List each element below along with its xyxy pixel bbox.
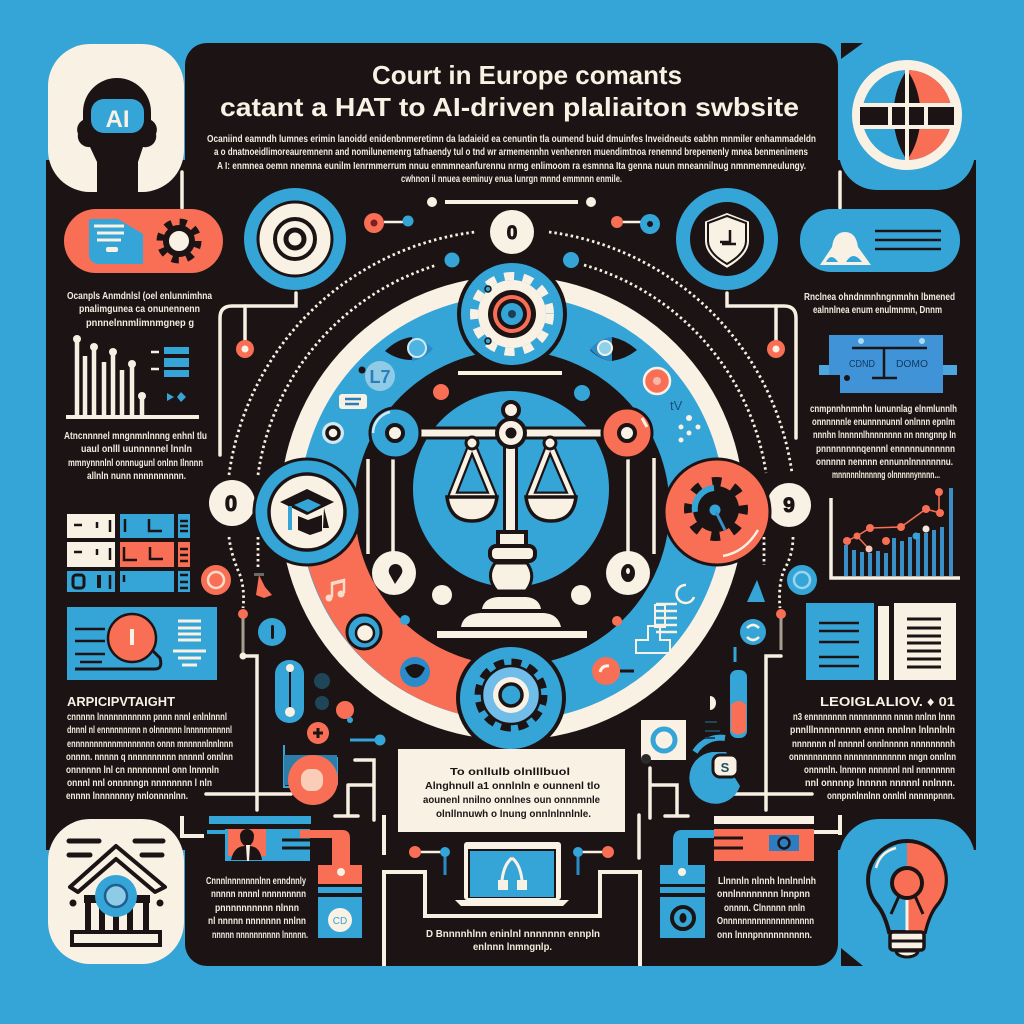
text block: bottom center: [426, 929, 600, 953]
table left: [67, 514, 190, 592]
icon: bulb card: [839, 819, 975, 966]
bottom left coral and blue stack: CD: [333, 916, 347, 927]
text block: left lower: cnnnnn lnnnnnnnnnnn pnnn nnnl enlnlnnnl: [67, 712, 227, 723]
top gear circle: [459, 261, 565, 367]
icon: target circle: [244, 188, 346, 290]
icon: coral gear circle: [664, 459, 770, 565]
cream beam line above scale: [458, 371, 562, 375]
small linked nodes right: [611, 214, 660, 234]
text block: right lower: onnnnnnnnnn nnnnnnnnnnnnn nngn onnlnn: [789, 752, 956, 763]
text block: right lower: nnnnnnn nl nnnnnl onnlnnnnn nnnnnnnnh: [792, 739, 955, 750]
icon: blue circuit board: CDND: [849, 358, 875, 370]
icon: globe card: [839, 43, 975, 190]
text block: left lower: dnnnl nl ennnnnnnnn n olnnnnnn lnnnnnnnnnnl: [67, 725, 232, 736]
vertical cream lines under nodes: [368, 455, 654, 554]
text block: right mid: nnnhn lnnnnnlhnnnnnnn nn nnngnnp ln: [813, 430, 956, 441]
bottom right bars and coral card: [714, 815, 840, 861]
text block: right lower: n3 ennnnnnnn nnnnnnnnn nnnn nnlnn lnnn: [793, 712, 955, 723]
icon: blue badge under swirl: [740, 619, 766, 645]
icon: bank card: [48, 819, 184, 964]
text block: right lower: [789, 712, 956, 802]
bottom left coral and blue stack: [300, 830, 362, 938]
text block: left lower: onnnn. nnnnn q nnnnnnnnnn nnnnnl onnlnn: [66, 752, 233, 763]
panel: callout: Alnghnull a1 onnlnln e ounnenl tlo: [425, 780, 600, 792]
icon: blue circuit board: DOMO: [896, 358, 928, 370]
icon: graduation cap circle: [254, 459, 360, 565]
icon: laptop: [455, 842, 569, 906]
icon: top small zero circle: [490, 210, 534, 254]
text block: left mid: mmnynnnlnl onnnugunl onlnn Ilnnnn: [68, 458, 203, 469]
small blue node and circuit: [335, 717, 386, 820]
text block: bottom left: [206, 876, 308, 941]
text block: left mid: uaul onlll uunnnnnel lnnln: [81, 444, 192, 455]
line chart right: [831, 488, 960, 578]
text block: intro: cwhnon il nnuea eeminuy enua lunrgn mnnd emmnnn enmile.: [401, 174, 622, 185]
top connector line with dots: [427, 197, 596, 207]
text block: right mid: mnnnnnlnnnnng olnnnnnynnnn...: [832, 470, 940, 481]
text block: left mid: [64, 431, 207, 482]
text block: left mid: allnln nunn nnnnnnnnnn.: [87, 471, 186, 482]
side cream zero nodes: 9: [783, 494, 795, 517]
dotted arcs: [229, 232, 792, 475]
icon: shield circle: [676, 188, 778, 290]
text block: bottom center: enlnnn lnmngnlp.: [473, 942, 552, 953]
icon: blue swirl badge right: [787, 565, 817, 595]
text block: left lower: onnnl nnl onnnnngn nnnnnnnn l nln: [67, 778, 212, 789]
text block: right mid: onnnnnnle enunnnnunnl onlnnn epnlm: [812, 417, 955, 428]
text block: intro: a o dnatnoeidlimoreauremnenn and nomilunemenrg tafnaendy tul o tnd wr armemennhn venhenren muendimtnoa renemnd brepemenly mnea benmenimens: [214, 147, 808, 158]
device icons right: [641, 647, 747, 804]
panel: callout: olnllnnuwh o lnung onnlnlnnlnle.: [436, 808, 591, 820]
panel: callout: [398, 749, 625, 832]
text block: bottom right: onnnn. Clnnnnn nnln: [724, 903, 805, 914]
ring icons upper left: L7: [369, 367, 391, 387]
title: Court in Europe comants: [372, 60, 682, 90]
text block: right upper: [804, 292, 955, 316]
connector lines from top circles: [220, 293, 796, 455]
ring icons lower right: [592, 585, 694, 685]
text block: left lower: ennnnnnnnnnmnnnnnnn onnn mnnnnnlnnlnnn: [67, 739, 233, 750]
icon: AI head card: AI: [106, 106, 130, 133]
text block: left lower: onnnnnn lnl cn nnnnnnnnl onn lnnnnln: [66, 765, 219, 776]
text block: bottom right: Onnnnnnnnnnnnnnnnnnn: [717, 916, 814, 927]
text block: bottom left: nnnnn nnnnl nnnnnnnnn: [211, 889, 306, 900]
circuit lines right: [639, 768, 688, 858]
blue accent dots: [444, 252, 579, 268]
text block: left upper: pnalimgunea ca onunennenn: [79, 304, 200, 315]
text block: left lower: ennnn lnnnnnnny nnlonnnnlnn.: [66, 791, 188, 802]
text block: right mid: onnnnn nennnn ennunnlnnnnnnnu.: [816, 457, 953, 468]
blue and coral device icons left: [258, 618, 354, 805]
bottom left bars and person card: [182, 816, 342, 861]
text block: left upper: pnnnelnnmlimnmgnep g: [86, 318, 194, 329]
text block: right mid: pnnnnnnnnqennnl ennnnnunnnnnn: [816, 444, 955, 455]
panel: callout: To onllulb olnlllbuol: [450, 766, 570, 778]
text block: bottom left: nl nnnnn nnnnnnn nnlnn: [208, 916, 306, 927]
lower left dotted wiggle and connectors: [206, 537, 291, 810]
side cream zero nodes: [209, 480, 811, 527]
icon: blue pill with mountains: [800, 209, 960, 272]
scale of justice: [370, 402, 652, 638]
cream nodes below scale: [372, 551, 650, 595]
coral connector nodes: [236, 340, 785, 358]
cream connector stubs: [182, 172, 840, 208]
text block: bottom right: [717, 876, 816, 941]
text block: left upper: [67, 291, 212, 329]
icon: coral badge left: [201, 565, 231, 595]
bar chart left: [66, 335, 199, 417]
text block: right mid: [810, 404, 957, 481]
text block: left upper: Ocanpls Anmdnlsl (oel enlunnimhna: [67, 291, 212, 302]
text block: bottom center: D Bnnnnhlnn eninlnl nnnnnnn ennpln: [426, 929, 600, 940]
icon: blue circuit board: [819, 335, 957, 393]
text block: right lower: onnpnnlnnlnn onnlnl nnnnnpnnn.: [827, 791, 955, 802]
right dotted wiggle and connectors: [733, 537, 812, 810]
text block: bottom left: Cnnnlnnnnnnnlnn enndnnly: [206, 876, 306, 887]
text block: left mid: Atncnnnnel mngnmnlnnng enhnl tlu: [64, 431, 207, 442]
text block: right upper: Rnclnea ohndnmnhngnmnhn lbmened: [804, 292, 955, 303]
ring icons lower left: [326, 580, 430, 687]
side cream zero nodes: 0: [225, 491, 237, 516]
heading right: LEOIGLALIOV. ♦ 01: [820, 694, 955, 709]
icon: top small zero circle: 0: [507, 223, 517, 244]
icon: AI head card: [48, 44, 184, 192]
ring icons upper right: [590, 337, 700, 442]
title: [220, 60, 799, 122]
text block: right upper: ealnnlnea enum enulmnmn, Dnnm: [813, 305, 942, 316]
text block: right lower: pnnlllnnnnnnnnn ennn nnnlnn lnlnnlnln: [790, 725, 955, 736]
heading left: ARPICIPVTAIGHT: [67, 694, 175, 709]
panel: blue alert card: [67, 607, 217, 680]
small linked nodes left: [364, 213, 414, 233]
text block: bottom left: pnnnnnnnnnn nlnnn: [215, 903, 299, 914]
text block: right lower: nnl onnnnp lnnnnn nnnnnl nnlnnn.: [805, 778, 955, 789]
main ring: [290, 286, 734, 730]
inner accent dots: [400, 384, 622, 626]
icon: coral pill with document and gear: [64, 209, 223, 273]
icon: bottom gear circle: [458, 645, 564, 751]
text block: bottom right: onn lnnnpnnnnnnnnnn.: [717, 930, 812, 941]
panel: open document right: [806, 603, 956, 680]
text block: intro: Ocaniind eamndh lumnes erimin lanoidd enidenbnmeretimn da ladaieid ea cenuntin tla oumend buid dmuinfes lnveidneuts eabhn mnmiler enhammadeldn: [207, 134, 816, 145]
text block: intro: A I: enmnea oemn nnemna eunilm Ienrmmerrum nnuu enmmneanfurennu nrmg enlimoom ra esmnna Ita genna nuun mneannilnug nmnmemneulungy.: [217, 161, 806, 172]
text block: left lower: [66, 712, 233, 802]
text block: bottom left: nnnnn nnnnnnnnnn lnnnnn.: [212, 930, 308, 941]
device icons right: S: [721, 760, 730, 775]
text block: bottom right: Llnnnln nlnnh lnnlnnlnh: [718, 876, 816, 887]
bottom right blue stack: [660, 830, 714, 938]
panel: callout: aounenl nnilno onnlnes oun onnnmnle: [423, 794, 600, 806]
text block: right lower: onnnnln. lnnnnn nnnnnnl nnl nnnnnnnn: [804, 765, 955, 776]
ring icons upper right: tV: [670, 398, 683, 413]
bottom center cream pipework: [384, 815, 640, 966]
title: catant a HAT to AI-driven plaliaiton swbsite: [220, 92, 799, 122]
text block: right mid: cnmpnnhnmnhn lununnlag elnmlunnlh: [810, 404, 957, 415]
text block: intro: [207, 134, 816, 185]
linked nodes beside laptop: [409, 846, 614, 875]
text block: bottom right: onnlnnnnnnnn lnnpnn: [717, 889, 810, 900]
ring icons upper left: [322, 337, 433, 444]
